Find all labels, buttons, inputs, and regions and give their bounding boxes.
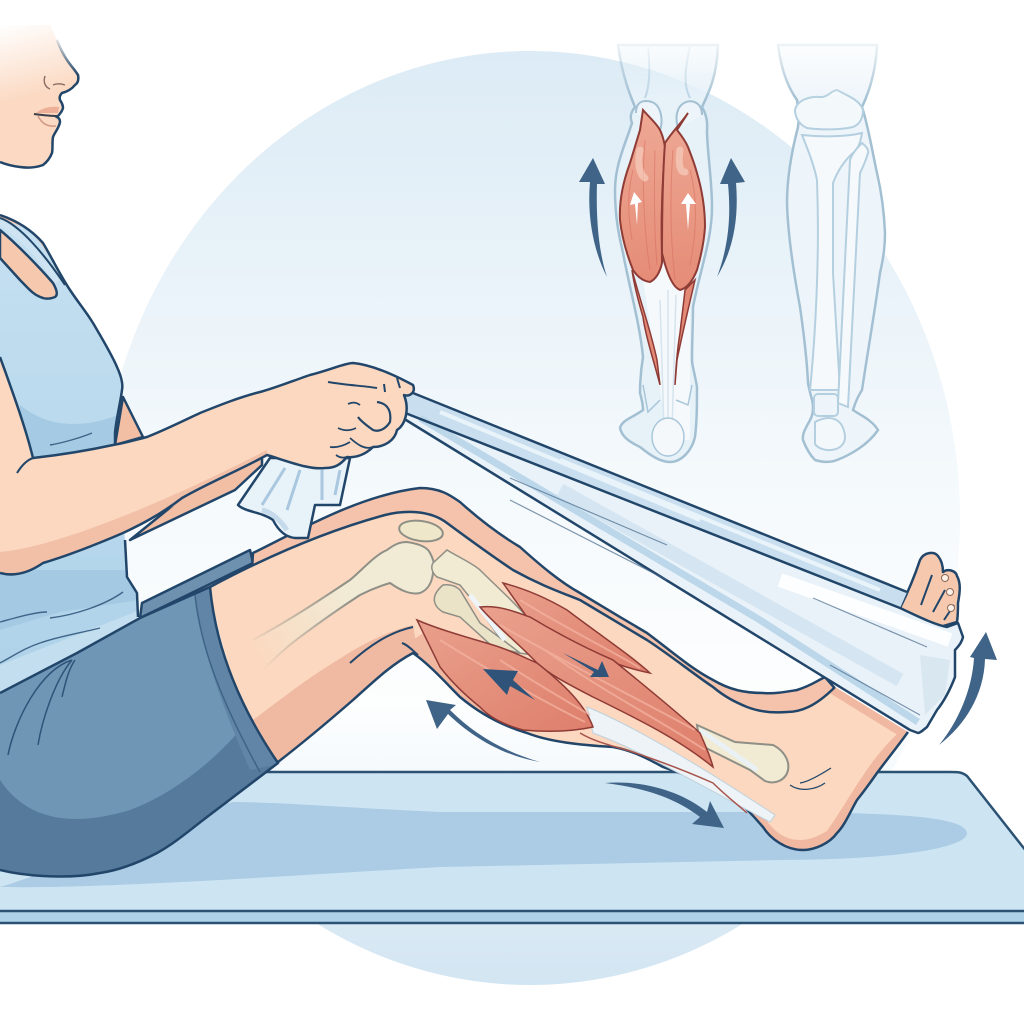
icon: small arrow on soleus [563, 653, 609, 677]
back shoulder [0, 215, 70, 290]
left gastrocnemius [620, 110, 665, 282]
near leg and foot [210, 512, 915, 852]
back forearm [130, 455, 262, 540]
icon: small arrow on gastrocnemius [483, 669, 535, 700]
mat shadow [0, 802, 967, 887]
towel end in hand [238, 458, 350, 538]
strap [0, 222, 57, 282]
background circle [100, 51, 960, 985]
knee creases [350, 627, 418, 663]
ankle crease [790, 768, 831, 789]
icon: curved arrow under heel [605, 782, 724, 828]
icon: rising arrow right [717, 158, 745, 277]
towel band [390, 393, 963, 733]
anatomy: leg bones front view [778, 45, 885, 462]
icon: rising arrow left [579, 158, 607, 277]
far leg [250, 488, 845, 725]
shorts [0, 585, 300, 880]
fibula upper [434, 585, 520, 653]
yoga mat [0, 772, 1024, 923]
tibia upper [432, 550, 535, 655]
soleus upper muscle [503, 583, 650, 673]
icon: curved arrow at toes [939, 632, 997, 745]
right gastrocnemius [662, 113, 705, 290]
achilles tendon [587, 707, 775, 822]
skin shading [253, 625, 915, 852]
icon: curved arrow behind calf [426, 700, 540, 762]
femur [253, 542, 434, 677]
back arm [115, 397, 143, 445]
torso tank top [0, 215, 140, 700]
lower tibia bone [697, 725, 788, 782]
gastrocnemius muscle [417, 620, 593, 731]
side muscles [632, 270, 660, 385]
anatomy: calf muscles rear view [615, 45, 718, 462]
far thigh shorts [140, 550, 253, 618]
middle muscle [480, 607, 713, 767]
head [0, 25, 78, 168]
toes [900, 553, 960, 630]
near arm and hand [0, 357, 414, 574]
neck opening skin [0, 230, 57, 299]
patella [398, 518, 444, 544]
